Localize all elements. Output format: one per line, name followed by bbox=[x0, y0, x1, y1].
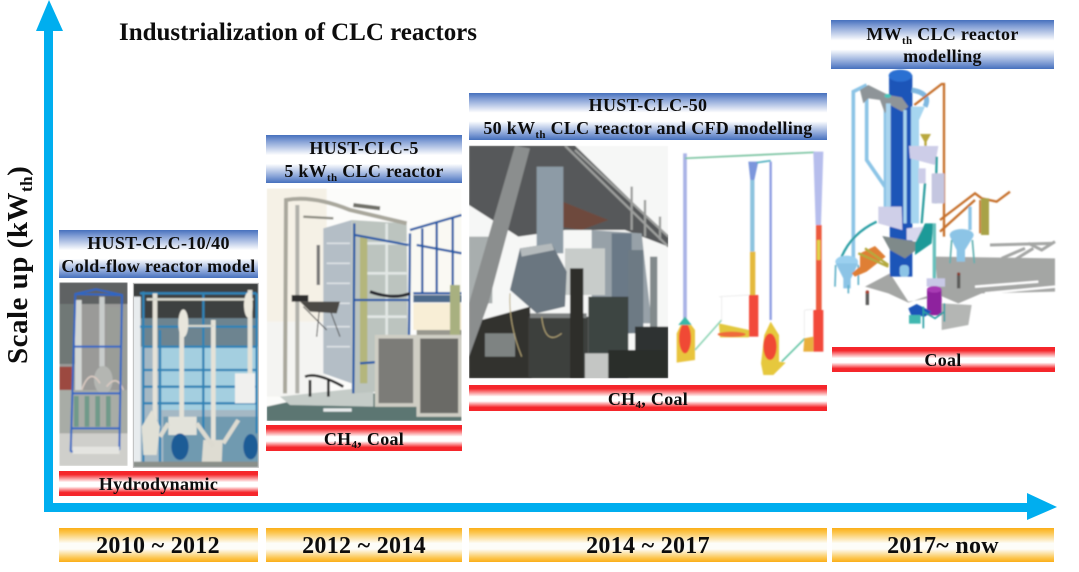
header: HUST-CLC-5: HUST-CLC-5 bbox=[309, 138, 419, 158]
label: CH4, Coal bbox=[266, 425, 462, 451]
illustration: MW reactor 3D model bbox=[835, 70, 1055, 330]
label: Hydrodynamic bbox=[59, 471, 258, 496]
header: HUST-CLC-50: 50 kW bbox=[483, 118, 535, 138]
year: 2012 ~ 2014 bbox=[266, 528, 462, 562]
panel: HUST-CLC-50 reactor and CFD bbox=[469, 93, 827, 562]
label: CH4, Coal bbox=[469, 385, 827, 411]
label: CH4, Coal: , Coal bbox=[357, 429, 404, 449]
header: HUST-CLC-5: CLC reactor bbox=[337, 161, 444, 181]
year: 2017~ now bbox=[832, 528, 1054, 562]
header: MW reactor modelling bbox=[831, 20, 1054, 69]
y axis arrow: scale up bbox=[36, 0, 63, 512]
y axis label: ) bbox=[2, 166, 34, 176]
year: 2012 ~ 2014: 2012 ~ 2014 bbox=[302, 533, 426, 559]
chart: CFD particle simulation bbox=[677, 152, 823, 375]
header: MW reactor modelling: modelling bbox=[903, 46, 982, 66]
label: Coal: Coal bbox=[924, 350, 962, 370]
year: 2010 ~ 2012: 2010 ~ 2012 bbox=[96, 533, 220, 559]
header: MW reactor modelling: th bbox=[902, 35, 912, 47]
y axis label: th bbox=[17, 176, 36, 192]
header: HUST-CLC-10/40 bbox=[59, 230, 258, 278]
header: HUST-CLC-10/40: HUST-CLC-10/40 bbox=[87, 233, 230, 253]
header: HUST-CLC-5 bbox=[266, 135, 462, 184]
header: HUST-CLC-5: th bbox=[327, 172, 337, 184]
label: CH4, Coal: 4 bbox=[351, 439, 357, 451]
header: HUST-CLC-10/40: Cold-flow reactor model bbox=[61, 256, 256, 276]
title: Industrialization of CLC reactors bbox=[119, 19, 477, 46]
year: 2017~ now: 2017~ now bbox=[887, 533, 999, 559]
header: HUST-CLC-50 bbox=[469, 93, 827, 141]
photo: cold-flow reactor model, large rig bbox=[133, 283, 258, 467]
label: Coal bbox=[832, 347, 1055, 372]
panel: MW CLC reactor modelling bbox=[831, 20, 1055, 562]
x axis arrow: time bbox=[44, 493, 1057, 520]
y axis label: Scale up (kW bbox=[2, 192, 34, 364]
label: CH4, Coal: , Coal bbox=[641, 389, 688, 409]
header: HUST-CLC-50: HUST-CLC-50 bbox=[589, 95, 707, 115]
header: HUST-CLC-50: th bbox=[535, 129, 546, 141]
year: 2014 ~ 2017 bbox=[469, 528, 827, 562]
photo: cold-flow reactor model, small rig bbox=[59, 282, 128, 466]
label: Hydrodynamic: Hydrodynamic bbox=[99, 474, 218, 494]
photo: 50 kW reactor bbox=[469, 146, 668, 378]
photo: 5 kW reactor bbox=[267, 188, 462, 421]
year: 2010 ~ 2012 bbox=[59, 528, 258, 562]
panel: HUST-CLC-10/40 cold-flow reactor bbox=[59, 230, 258, 562]
header: HUST-CLC-5: 5 kW bbox=[284, 161, 327, 181]
label: CH4, Coal: CH bbox=[324, 429, 351, 449]
header: MW reactor modelling: MW bbox=[866, 24, 902, 44]
year: 2014 ~ 2017: 2014 ~ 2017 bbox=[586, 533, 710, 559]
header: MW reactor modelling: CLC reactor bbox=[912, 24, 1019, 44]
panel: HUST-CLC-5 reactor bbox=[266, 135, 462, 562]
label: CH4, Coal: CH bbox=[608, 389, 635, 409]
label: CH4, Coal: 4 bbox=[635, 399, 641, 411]
header: HUST-CLC-50: CLC reactor and CFD modelling bbox=[546, 118, 813, 138]
